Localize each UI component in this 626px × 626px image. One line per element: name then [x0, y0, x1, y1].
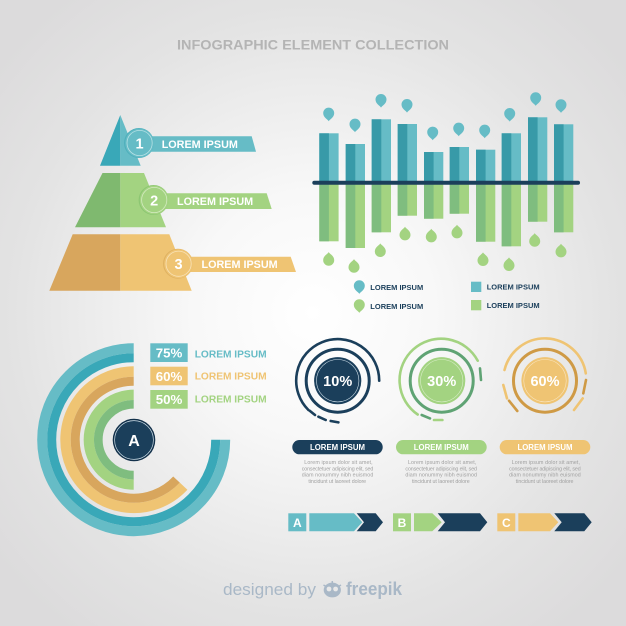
- chart legend: LOREM IPSUM: [370, 283, 423, 292]
- footer credit: freepik: [346, 579, 403, 599]
- teal arc 75%: [42, 348, 225, 531]
- footer credit: [223, 579, 403, 599]
- text card 2: diam nonummy nibh euismod: [405, 473, 477, 479]
- text card 1: [292, 440, 383, 485]
- green arc 50%: [89, 395, 134, 485]
- text card 3: [500, 440, 590, 485]
- text card 1: LOREM IPSUM: [310, 443, 365, 452]
- text card 1: consectetuer adipiscing elit, sed: [302, 466, 373, 472]
- gauge 10%: [296, 339, 379, 422]
- text card 2: consectetuer adipiscing elit, sed: [405, 466, 477, 472]
- pyramid tier 1: LOREM IPSUM: [162, 139, 238, 151]
- chart legend: LOREM IPSUM: [487, 301, 540, 310]
- chart legend: [354, 280, 540, 313]
- gauge 30%: 30%: [427, 374, 456, 390]
- progress arrow A: A: [293, 516, 302, 530]
- gauge 30%: [400, 339, 481, 420]
- title: INFOGRAPHIC ELEMENT COLLECTION: [177, 36, 449, 52]
- legend row 75%: [150, 343, 267, 362]
- diverging bar chart: [312, 92, 580, 313]
- legend row 50%: LOREM IPSUM: [195, 394, 267, 405]
- pyramid tier 2: [75, 173, 272, 227]
- gauge 60%: [503, 338, 586, 412]
- axis line: [312, 181, 580, 185]
- legend row 75%: LOREM IPSUM: [195, 349, 267, 360]
- progress arrow C: [497, 513, 592, 531]
- gauge 10%: 10%: [323, 374, 352, 390]
- text card 3: diam nonummy nibh euismod: [509, 473, 581, 479]
- radial bar chart: [42, 343, 267, 531]
- center badge A: [113, 419, 155, 461]
- legend row 60%: [150, 367, 267, 385]
- pyramid chart: [49, 115, 296, 291]
- text card 1: Lorem ipsum dolor sit amet,: [304, 460, 373, 466]
- text card 2: tincidunt ut laoreet dolore: [412, 479, 470, 485]
- upper teal bars: [319, 117, 573, 183]
- gauge 60%: 60%: [530, 374, 560, 390]
- yellow arc 60%: [66, 372, 184, 508]
- pyramid tier 3: [49, 234, 296, 291]
- icon: freepik mascot: [324, 581, 341, 597]
- center badge A: A: [128, 433, 140, 450]
- legend row 75%: 75%: [156, 346, 182, 360]
- chart legend: LOREM IPSUM: [370, 302, 423, 311]
- progress arrow B: [393, 513, 487, 531]
- chart legend: LOREM IPSUM: [487, 282, 540, 291]
- text card 3: LOREM IPSUM: [517, 443, 573, 452]
- pyramid tier 1: [100, 115, 256, 166]
- text card 1: tincidunt ut laoreet dolore: [308, 479, 366, 485]
- footer credit: designed by: [223, 580, 317, 599]
- green drop markers: [323, 225, 566, 273]
- text card 2: LOREM IPSUM: [414, 443, 469, 452]
- text card 2: [396, 440, 487, 485]
- text card 1: diam nonummy nibh euismod: [302, 473, 373, 479]
- pyramid tier 3: 3: [175, 257, 183, 273]
- legend row 50%: [150, 390, 267, 409]
- legend row 60%: LOREM IPSUM: [195, 372, 267, 383]
- progress arrow A: [288, 513, 383, 531]
- pyramid tier 2: LOREM IPSUM: [177, 196, 253, 208]
- text card 3: consectetuer adipiscing elit, sed: [509, 466, 581, 472]
- text card 3: tincidunt ut laoreet dolore: [516, 479, 574, 485]
- text card 2: Lorem ipsum dolor sit amet,: [408, 460, 476, 466]
- legend row 60%: 60%: [156, 369, 182, 384]
- pyramid tier 3: LOREM IPSUM: [202, 259, 278, 271]
- teal drop markers: [323, 92, 566, 140]
- pyramid tier 2: 2: [150, 193, 158, 209]
- pyramid tier 1: 1: [135, 136, 144, 152]
- progress arrow B: B: [398, 516, 407, 530]
- lower green bars: [319, 183, 573, 248]
- progress arrow C: C: [502, 516, 511, 530]
- legend row 50%: 50%: [156, 392, 182, 407]
- text card 3: Lorem ipsum dolor sit amet,: [512, 460, 580, 466]
